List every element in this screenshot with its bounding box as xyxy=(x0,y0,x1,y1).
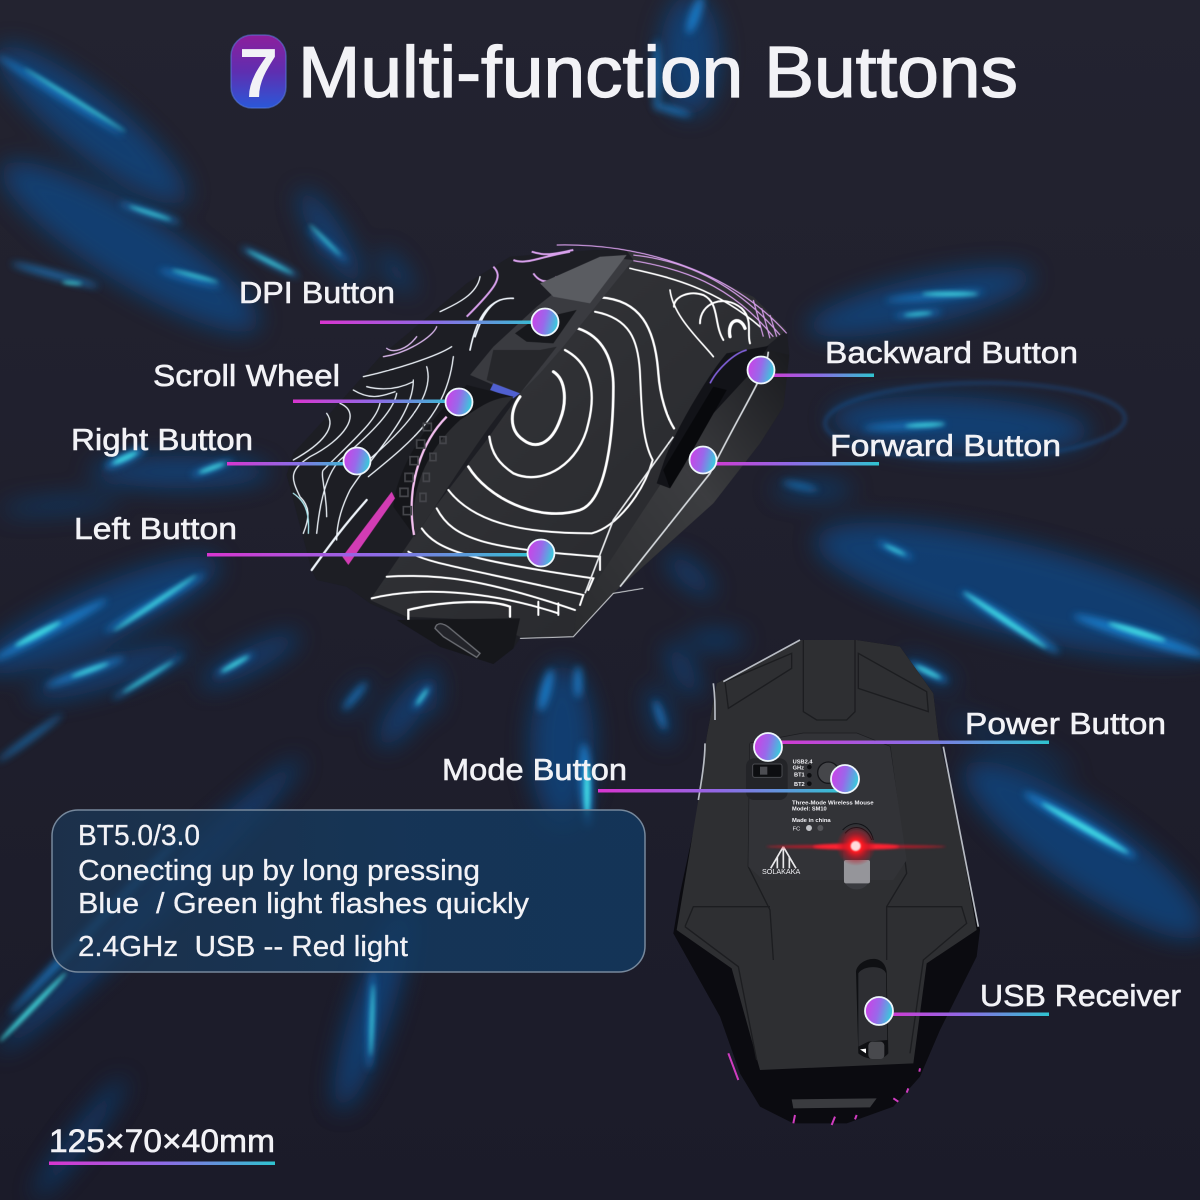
info panel xyxy=(52,810,645,972)
bottom grip and pink trim xyxy=(728,1053,920,1125)
contour lines: palm rest xyxy=(372,268,760,620)
callout: Right Button: Right Button xyxy=(71,422,253,457)
callout: Right Button xyxy=(71,422,370,474)
underside label text: USB2.4 xyxy=(793,759,813,765)
title text: Multi-function Buttons xyxy=(298,33,1018,113)
callout: Scroll Wheel: Scroll Wheel xyxy=(153,358,340,393)
callout: Mode Button: Mode Button xyxy=(442,752,627,787)
callout: Left Button: Left Button xyxy=(74,511,237,546)
underside label text: GHz xyxy=(793,765,804,771)
callout: DPI Button xyxy=(239,275,558,336)
underside label text: Three-Mode Wireless Mouse xyxy=(792,800,874,806)
right side panel xyxy=(573,350,789,637)
contour lines: right button xyxy=(293,277,513,570)
central palm shell xyxy=(370,251,787,637)
underside label text: Model: SM10 xyxy=(792,806,827,812)
magenta accent bar xyxy=(342,492,395,565)
callout: Forward Button xyxy=(690,428,1061,474)
callout: Left Button xyxy=(74,511,554,566)
icon: number 7 badge: 7 xyxy=(239,34,278,112)
panel text xyxy=(78,820,530,963)
panel text: 2.4GHz USB -- Red light xyxy=(78,931,408,963)
underside label text: BT2 xyxy=(794,782,805,788)
underside label text: FC xyxy=(793,826,800,832)
scroll wheel xyxy=(393,385,513,537)
power button xyxy=(818,762,839,783)
panel text: Conecting up by long pressing xyxy=(78,855,480,887)
base plate xyxy=(677,640,977,1070)
callout: Forward Button: Forward Button xyxy=(830,428,1061,463)
side buttons xyxy=(585,346,768,593)
faint ring around forward label xyxy=(824,380,1126,462)
underside label text: BT1 xyxy=(794,773,805,779)
DPI button and wheel housing xyxy=(470,255,633,398)
title xyxy=(231,33,1018,113)
callout: Backward Button: Backward Button xyxy=(825,335,1078,370)
logo: Solakaka: SOLAKAKA xyxy=(762,869,801,876)
plate seams xyxy=(685,640,967,1060)
dimensions label: 125×70×40mm xyxy=(49,1123,275,1159)
mouse: bottom view xyxy=(673,640,980,1125)
center label plate xyxy=(748,733,907,880)
panel text: BT5.0/3.0 xyxy=(78,820,200,852)
callout: Power Button: Power Button xyxy=(965,706,1166,741)
callout: Backward Button xyxy=(748,335,1078,384)
highlights on side edges xyxy=(698,640,978,927)
underside label text: Made in china xyxy=(792,818,832,824)
mode switch xyxy=(746,758,788,800)
underside label text xyxy=(792,759,874,832)
mouse: top view xyxy=(287,245,789,664)
front USB port xyxy=(397,588,643,664)
status LEDs xyxy=(806,765,823,831)
USB receiver slot xyxy=(856,959,888,1059)
callout: DPI Button: DPI Button xyxy=(239,275,395,310)
callout: Scroll Wheel xyxy=(153,358,472,416)
mouse body silhouette xyxy=(287,249,789,664)
callout: Power Button xyxy=(754,706,1166,761)
callout: USB Receiver xyxy=(865,978,1181,1025)
contour lines: top purple arcs xyxy=(467,245,787,338)
callout: USB Receiver: USB Receiver xyxy=(980,978,1181,1013)
callout: Mode Button xyxy=(442,752,859,793)
underside silhouette xyxy=(673,640,980,1123)
panel text: Blue / Green light flashes quickly xyxy=(78,888,530,920)
logo: Solakaka xyxy=(762,847,801,876)
optical sensor with red light xyxy=(766,824,946,889)
